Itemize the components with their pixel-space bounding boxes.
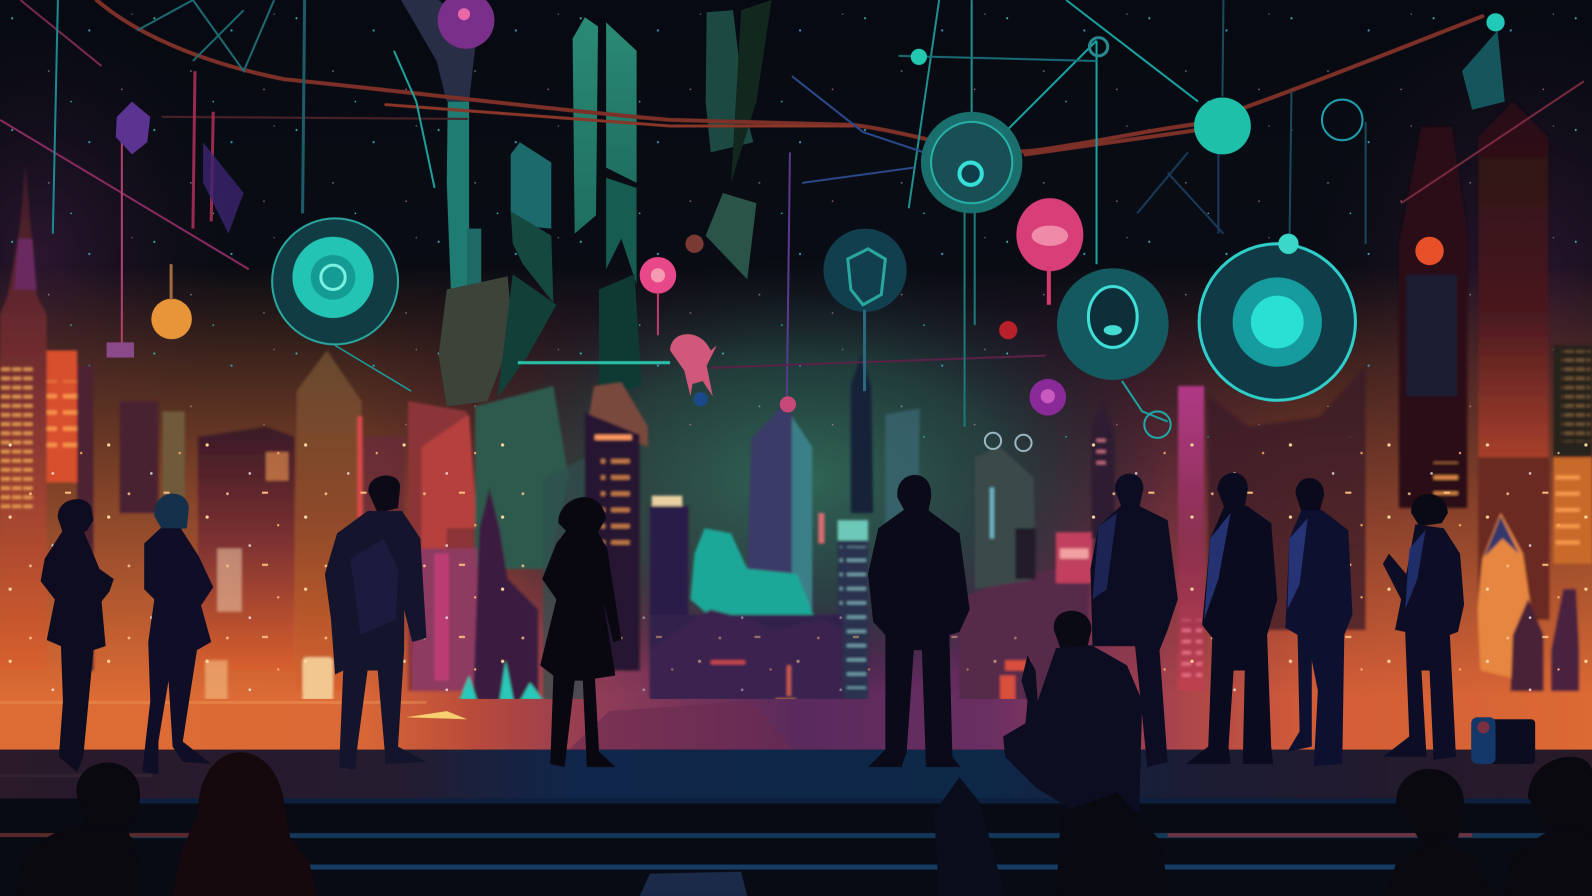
right skyline	[1178, 102, 1592, 691]
orb: leaf cube	[823, 229, 907, 391]
small orbs	[107, 0, 1505, 451]
red cables	[96, 0, 1482, 154]
person: woman right with phone	[1383, 494, 1464, 760]
orb: top centre target	[921, 112, 1022, 213]
audience silhouettes	[15, 752, 1592, 896]
orb: face	[1057, 268, 1169, 380]
background sky	[0, 14, 1592, 700]
city ground	[0, 699, 1592, 752]
orb: pink	[1016, 198, 1083, 305]
person: man 8	[1285, 478, 1352, 766]
person: man in jacket	[325, 476, 426, 770]
person: woman in dress	[540, 497, 621, 767]
stage steps	[0, 750, 1592, 896]
person: man 7	[1186, 473, 1277, 764]
orb: large left teal	[272, 218, 398, 344]
thin neon lines	[0, 0, 1584, 427]
person: seated man	[1003, 611, 1142, 813]
person: woman 1	[41, 499, 114, 772]
city bokeh lights	[0, 437, 1592, 742]
person: man 6	[1090, 474, 1178, 767]
luggage	[1471, 717, 1535, 764]
orb: large right	[1199, 234, 1355, 400]
left skyline	[0, 163, 404, 711]
upper teal towers	[401, 0, 1505, 406]
orb: top right teal	[1194, 98, 1251, 154]
person: man centre	[868, 475, 970, 767]
centre skyline	[408, 356, 1115, 711]
person: woman 2	[142, 494, 213, 774]
